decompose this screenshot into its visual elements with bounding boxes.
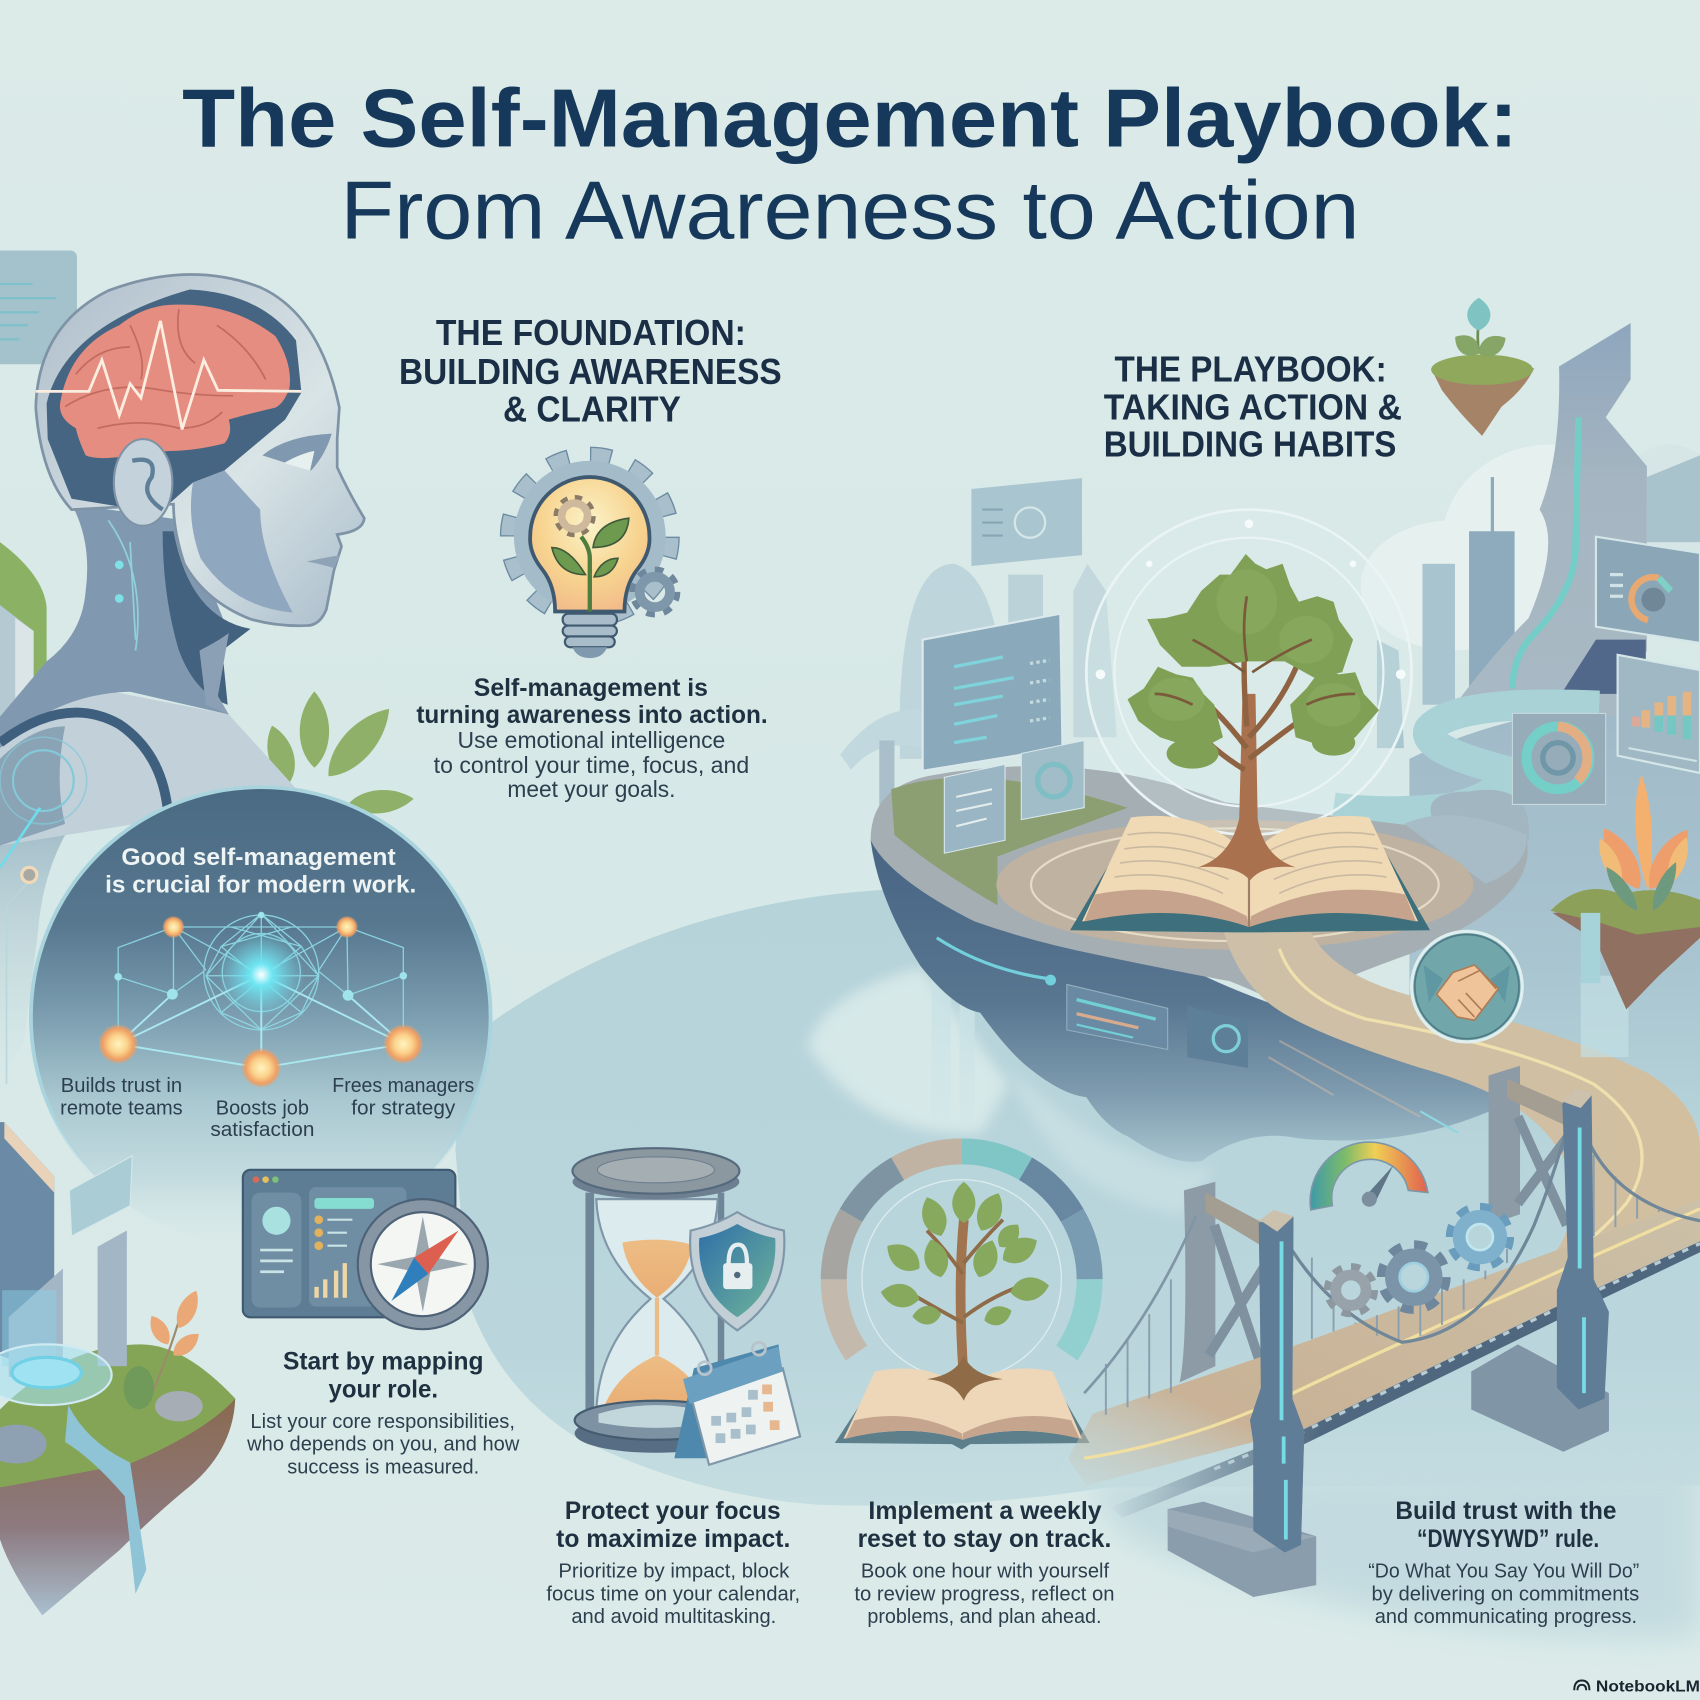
heading: the foundation [399,313,782,430]
title: The Self-Management Playbook: [182,72,1518,164]
trunk and branches [1198,694,1296,880]
benefit labels: Builds trust in [61,1075,182,1097]
title [182,72,1518,257]
text: protect your focus [546,1497,800,1628]
icon: interlocking gears [1329,1209,1508,1312]
network diagram [99,912,423,1087]
title: From Awareness to Action [340,165,1360,257]
circle heading [105,844,416,898]
text: start by mapping: who depends on you, and how [246,1434,520,1456]
text: protect your focus: and avoid multitasking. [571,1606,776,1628]
hanging light columns [931,960,975,1138]
panels right of tree [1512,537,1700,804]
text: protect your focus: to maximize impact. [556,1525,790,1553]
underside data panels [1067,984,1248,1068]
circle heading: is crucial for modern work. [105,871,416,898]
text: self-management definition: turning awareness into action. [416,701,768,729]
heading: the foundation: & CLARITY [503,390,681,430]
truss [1111,1241,1700,1518]
deck [1068,1199,1700,1485]
benefit labels: satisfaction [210,1119,314,1141]
text: self-management definition [416,674,768,802]
text: protect your focus: Prioritize by impact, block [558,1560,790,1582]
text: protect your focus: Protect your focus [565,1497,781,1525]
icon: tree in glass sphere growing from book [1070,510,1430,939]
green hill and building behind figure [0,542,47,737]
orange plant [150,1301,184,1399]
text: protect your focus: focus time on your calendar, [546,1583,800,1605]
text: weekly reset: to review progress, reflect on [854,1583,1115,1605]
benefit labels: Frees managers [332,1075,474,1097]
open book [1070,816,1430,939]
plant behind figure [260,691,415,816]
icon: dashboard with compass [243,1170,488,1329]
text: dwyswd rule: by delivering on commitments [1371,1583,1639,1605]
tall futuristic building [1455,323,1700,716]
text: start by mapping: Start by mapping [283,1347,484,1375]
text: dwyswd rule [1368,1497,1639,1628]
heading: the playbook: BUILDING HABITS [1104,424,1396,464]
benefit labels: Boosts job [216,1098,309,1120]
eye [262,434,332,471]
text: self-management definition: to control your time, focus, and [434,752,749,778]
shield [690,1212,784,1330]
text: dwyswd rule: “Do What You Say You Will Do” [1368,1560,1639,1582]
river [1334,705,1599,858]
text: weekly reset: problems, and plan ahead. [867,1606,1102,1628]
text: dwyswd rule: “DWYSYWD” rule. [1417,1525,1599,1553]
benefit labels: remote teams [60,1098,183,1120]
heading: the playbook: TAKING ACTION & [1104,388,1402,428]
text: self-management definition: Self-management is [474,674,708,702]
shell [36,275,364,626]
text: weekly reset: Book one hour with yourself [861,1560,1110,1582]
ring segments [834,1151,1090,1353]
holographic ring [2,1290,56,1366]
background swoosh path [455,889,1700,1638]
main cables [1276,1120,1569,1342]
dark cavity [47,289,301,510]
calendar [674,1344,783,1458]
text: start by mapping: success is measured. [287,1456,479,1478]
heading: the foundation: THE FOUNDATION: [436,313,746,353]
neck [0,504,229,748]
screen panels left of tree [923,614,1084,853]
benefit labels: for strategy [351,1098,455,1120]
text: self-management definition: Use emotional intelligence [458,727,725,753]
icon: handshake badge [1412,931,1522,1042]
background clouds and skyline [840,445,1700,1149]
text: start by mapping [246,1347,520,1478]
platform with underside [871,766,1528,1162]
floating island with flower [1550,774,1700,1057]
icon: habit ring with tree and book [834,1151,1090,1450]
icon: light bulb with gear and sprout [510,456,674,658]
back tower [1180,1066,1609,1452]
benefit labels [60,1075,474,1141]
heading: the playbook [1104,350,1402,464]
shoulder strap [0,713,168,813]
text: weekly reset [854,1497,1115,1628]
front towers [1168,1089,1609,1597]
compass [358,1199,488,1329]
text: weekly reset: reset to stay on track. [858,1525,1111,1553]
figure: head and shoulders with brain [0,275,364,883]
icon: gauge [1310,1142,1428,1210]
bridge [1068,1066,1700,1597]
book [835,1377,1090,1450]
lips [307,555,340,568]
text: start by mapping: your role. [329,1376,438,1404]
panel: modern work circle [31,787,491,1247]
brain [60,305,290,458]
heading: the playbook: THE PLAYBOOK: [1115,350,1387,390]
ECG line [36,321,301,429]
heading: the foundation: BUILDING AWARENESS [399,352,782,392]
icon: hourglass with shield and calendar [572,1148,800,1465]
text: start by mapping: List your core responsibilities, [250,1411,515,1433]
left window panel [0,250,77,364]
NotebookLM watermark: NotebookLM [1596,1678,1700,1695]
shoulders [0,678,304,846]
circle heading: Good self-management [121,844,396,871]
left floating island [0,1122,235,1615]
text: dwyswd rule: Build trust with the [1395,1497,1617,1525]
ear [114,439,172,526]
circuit rings [13,750,74,811]
text: weekly reset: Implement a weekly [868,1497,1102,1525]
hangers [1106,1155,1659,1415]
text: self-management definition: meet your goals. [507,776,675,802]
cheek [191,471,293,613]
towers [0,1122,54,1377]
text: dwyswd rule: and communicating progress. [1375,1606,1637,1628]
canopy [1128,554,1379,769]
top small window [971,478,1082,566]
left arm panel fading below shoulder [0,802,87,1084]
road [1224,932,1700,1350]
floating island top right with sprout [1431,298,1534,436]
